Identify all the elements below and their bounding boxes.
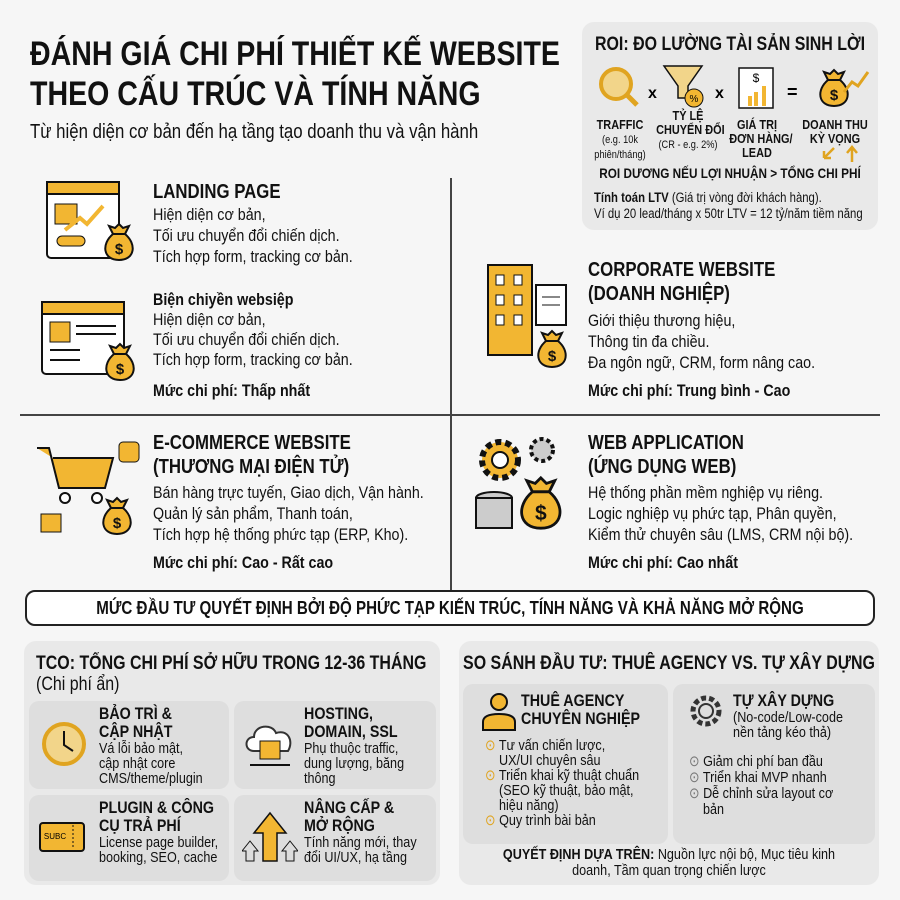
text: e-commerce bbox=[153, 432, 424, 572]
icon: clock bbox=[42, 722, 86, 766]
card: maintenance bbox=[29, 701, 229, 789]
icon: ticket bbox=[39, 822, 85, 852]
ROI formula icons: x bbox=[715, 85, 724, 102]
text: website: Biện chiyền websiệp bbox=[153, 290, 293, 309]
card: agency bbox=[463, 684, 668, 844]
card: agency: ⊙ Triển khai kỹ thuật chuẩn bbox=[485, 767, 639, 784]
TCO heading: (Chi phí ẩn) bbox=[36, 674, 119, 695]
ROI condition: ROI DƯƠNG NẾU LỢI NHUẬN > TỔNG CHI PHÍ bbox=[599, 165, 861, 181]
icon: arrows up bbox=[242, 812, 298, 862]
TCO heading bbox=[36, 652, 426, 695]
subtitle: Từ hiện diện cơ bản đến hạ tầng tạo doanh thu và vận hành bbox=[30, 121, 478, 143]
text: web app: Kiểm thử chuyên sâu (LMS, CRM nội bộ). bbox=[588, 525, 853, 544]
card: self build: TỰ XÂY DỰNG bbox=[733, 691, 834, 710]
panel: compare bbox=[459, 641, 879, 885]
LTV note bbox=[594, 190, 863, 221]
card: agency: ⊙ Tư vấn chiến lược, bbox=[485, 737, 605, 754]
card: upgrade: NÂNG CẤP & bbox=[304, 798, 394, 817]
panel: web app bbox=[475, 432, 853, 572]
icon: ticket: SUBC bbox=[44, 832, 66, 841]
card: maintenance: CẬP NHẬT bbox=[99, 722, 173, 741]
LTV note: Ví dụ 20 lead/tháng x 50tr LTV = 12 tỷ/năm tiềm năng bbox=[594, 206, 863, 221]
icon: person bbox=[482, 693, 516, 731]
text: website: Tối ưu chuyển đổi chiến dịch. bbox=[153, 330, 340, 349]
text: e-commerce: (THƯƠNG MẠI ĐIỆN TỬ) bbox=[153, 456, 349, 478]
text: website bbox=[153, 290, 353, 400]
text: web app: Logic nghiệp vụ phức tạp, Phân quyền, bbox=[588, 504, 837, 523]
card: self build bbox=[673, 684, 875, 844]
card: agency: UX/UI chuyên sâu bbox=[499, 752, 601, 769]
card: plugins: License page builder, bbox=[99, 834, 218, 851]
card: upgrade: Tính năng mới, thay bbox=[304, 834, 417, 851]
card: maintenance: CMS/theme/plugin bbox=[99, 770, 203, 787]
panel: ROI: (CR - e.g. 2%) bbox=[658, 139, 718, 151]
decision note bbox=[503, 846, 835, 879]
icon: cloud server bbox=[246, 726, 292, 766]
title bbox=[30, 35, 560, 113]
text: web app: Mức chi phí: Cao nhất bbox=[588, 553, 738, 572]
icon: gears/database bbox=[475, 437, 562, 530]
text: corporate: CORPORATE WEBSITE bbox=[588, 259, 775, 281]
text: landing page bbox=[153, 181, 353, 266]
card: agency: THUÊ AGENCY bbox=[521, 691, 624, 710]
card: self build: nền tảng kéo thả) bbox=[733, 724, 831, 741]
TCO heading: TCO: TỔNG CHI PHÍ SỞ HỮU TRONG 12-36 THÁNG bbox=[36, 653, 426, 674]
banner bbox=[25, 590, 875, 626]
panel: ROI: GIÁ TRỊ bbox=[737, 117, 777, 132]
text: corporate: Thông tin đa chiều. bbox=[588, 332, 709, 351]
ROI formula icons: = bbox=[787, 82, 798, 102]
text: e-commerce: Tích hợp hệ thống phức tạp (ERP, Kho). bbox=[153, 525, 408, 544]
icon: cart bbox=[37, 442, 140, 535]
card: upgrade bbox=[234, 795, 436, 881]
text: landing page: LANDING PAGE bbox=[153, 181, 281, 203]
card: agency: CHUYÊN NGHIỆP bbox=[521, 709, 640, 728]
ROI labels: phiên/tháng) bbox=[594, 149, 646, 161]
card: hosting: thông bbox=[304, 770, 336, 787]
title: THEO CẤU TRÚC VÀ TÍNH NĂNG bbox=[30, 75, 481, 113]
card: self build: ⊙ Giảm chi phí ban đầu bbox=[689, 753, 823, 770]
text: website: Hiện diện cơ bản, bbox=[153, 310, 266, 329]
icon: building bbox=[487, 264, 567, 368]
decision note: QUYẾT ĐỊNH DỰA TRÊN: Nguồn lực nội bộ, Mục tiêu kinh bbox=[503, 846, 835, 863]
arrows bbox=[822, 145, 858, 162]
banner: MỨC ĐẦU TƯ QUYẾT ĐỊNH BỞI ĐỘ PHỨC TẠP KIẾN TRÚC, TÍNH NĂNG VÀ KHẢ NĂNG MỞ RỘNG bbox=[96, 598, 804, 618]
text: web app: (ỨNG DỤNG WEB) bbox=[588, 456, 736, 478]
card: hosting bbox=[234, 701, 436, 789]
panel: ROI bbox=[582, 22, 878, 230]
ROI labels bbox=[594, 117, 646, 161]
icon: website bbox=[41, 301, 135, 381]
text: corporate bbox=[588, 259, 815, 400]
panel: ROI: TỶ LỆ bbox=[673, 108, 703, 123]
card: hosting: DOMAIN, SSL bbox=[304, 722, 398, 741]
text: e-commerce: E-COMMERCE WEBSITE bbox=[153, 432, 351, 454]
text: website: Mức chi phí: Thấp nhất bbox=[153, 381, 310, 400]
panel: corporate bbox=[487, 259, 815, 400]
panel: e-commerce bbox=[37, 432, 424, 572]
ROI formula icons bbox=[599, 65, 870, 109]
ROI labels: TRAFFIC bbox=[597, 117, 643, 132]
text: corporate: Đa ngôn ngữ, CRM, form nâng cao. bbox=[588, 353, 815, 372]
text: e-commerce: Mức chi phí: Cao - Rất cao bbox=[153, 553, 333, 572]
text: e-commerce: Quản lý sản phẩm, Thanh toán, bbox=[153, 504, 353, 523]
panel: ROI: KỲ VỌNG bbox=[810, 131, 860, 146]
text: web app: Hệ thống phần mềm nghiệp vụ riêng. bbox=[588, 483, 823, 502]
text: e-commerce: Bán hàng trực tuyến, Giao dịch, Vận hành. bbox=[153, 483, 424, 502]
text: corporate: (DOANH NGHIỆP) bbox=[588, 283, 730, 305]
panel: ROI: ĐƠN HÀNG/ bbox=[729, 131, 793, 146]
card: plugins: booking, SEO, cache bbox=[99, 849, 217, 866]
card: upgrade: MỞ RỘNG bbox=[304, 816, 375, 835]
LTV note: Tính toán LTV (Giá trị vòng đời khách hàng). bbox=[594, 190, 822, 205]
text: web app bbox=[588, 432, 853, 572]
card: hosting: HOSTING, bbox=[304, 704, 373, 723]
text: web app: WEB APPLICATION bbox=[588, 432, 744, 454]
card: maintenance: BẢO TRÌ & bbox=[99, 704, 172, 723]
card: agency: hiệu năng) bbox=[499, 797, 559, 814]
decision note: doanh, Tầm quan trọng chiến lược bbox=[572, 862, 766, 879]
card: self build: ⊙ Dễ chỉnh sửa layout cơ bbox=[689, 785, 833, 802]
card: self build: bản bbox=[703, 801, 724, 818]
card: plugins bbox=[29, 795, 229, 881]
card: hosting: Phụ thuộc traffic, bbox=[304, 740, 398, 757]
icon: landing page bbox=[46, 181, 134, 261]
card: agency: (SEO kỹ thuật, bảo mật, bbox=[499, 782, 633, 799]
ROI formula icons: x bbox=[648, 85, 657, 102]
ROI formula icons: % bbox=[690, 94, 699, 105]
card: maintenance: Vá lỗi bảo mật, bbox=[99, 740, 183, 757]
panel: ROI: LEAD bbox=[742, 145, 772, 160]
ROI heading: ROI: ĐO LƯỜNG TÀI SẢN SINH LỜI bbox=[595, 34, 865, 55]
compare heading: SO SÁNH ĐẦU TƯ: THUÊ AGENCY VS. TỰ XÂY DỰNG bbox=[463, 653, 875, 674]
card: plugins: PLUGIN & CÔNG bbox=[99, 798, 214, 817]
grid dividers bbox=[450, 178, 452, 590]
card: self build: (No-code/Low-code bbox=[733, 709, 843, 726]
ROI formula icons: $ bbox=[753, 71, 760, 85]
text: landing page: Tích hợp form, tracking cơ bản. bbox=[153, 247, 353, 266]
card: self build: ⊙ Triển khai MVP nhanh bbox=[689, 769, 827, 786]
text: landing page: Hiện diện cơ bản, bbox=[153, 205, 266, 224]
panel: ROI: DOANH THU bbox=[802, 117, 868, 132]
text: corporate: Giới thiệu thương hiệu, bbox=[588, 311, 735, 330]
panel: ROI: CHUYỂN ĐỔI bbox=[656, 122, 725, 137]
text: corporate: Mức chi phí: Trung bình - Cao bbox=[588, 381, 790, 400]
text: landing page: Tối ưu chuyển đổi chiến dịch. bbox=[153, 226, 340, 245]
panel: TCO bbox=[24, 641, 440, 885]
ROI labels: (e.g. 10k bbox=[602, 134, 638, 146]
card: plugins: CỤ TRẢ PHÍ bbox=[99, 816, 181, 835]
card: hosting: dung lượng, băng bbox=[304, 755, 404, 772]
icon: gear bbox=[690, 696, 722, 726]
text: website: Tích hợp form, tracking cơ bản. bbox=[153, 350, 353, 369]
card: maintenance: cập nhật core bbox=[99, 755, 175, 772]
card: upgrade: đổi UI/UX, hạ tầng bbox=[304, 849, 407, 866]
panel: landing page bbox=[41, 181, 353, 400]
title: ĐÁNH GIÁ CHI PHÍ THIẾT KẾ WEBSITE bbox=[30, 35, 560, 73]
card: agency: ⊙ Quy trình bài bản bbox=[485, 812, 596, 829]
